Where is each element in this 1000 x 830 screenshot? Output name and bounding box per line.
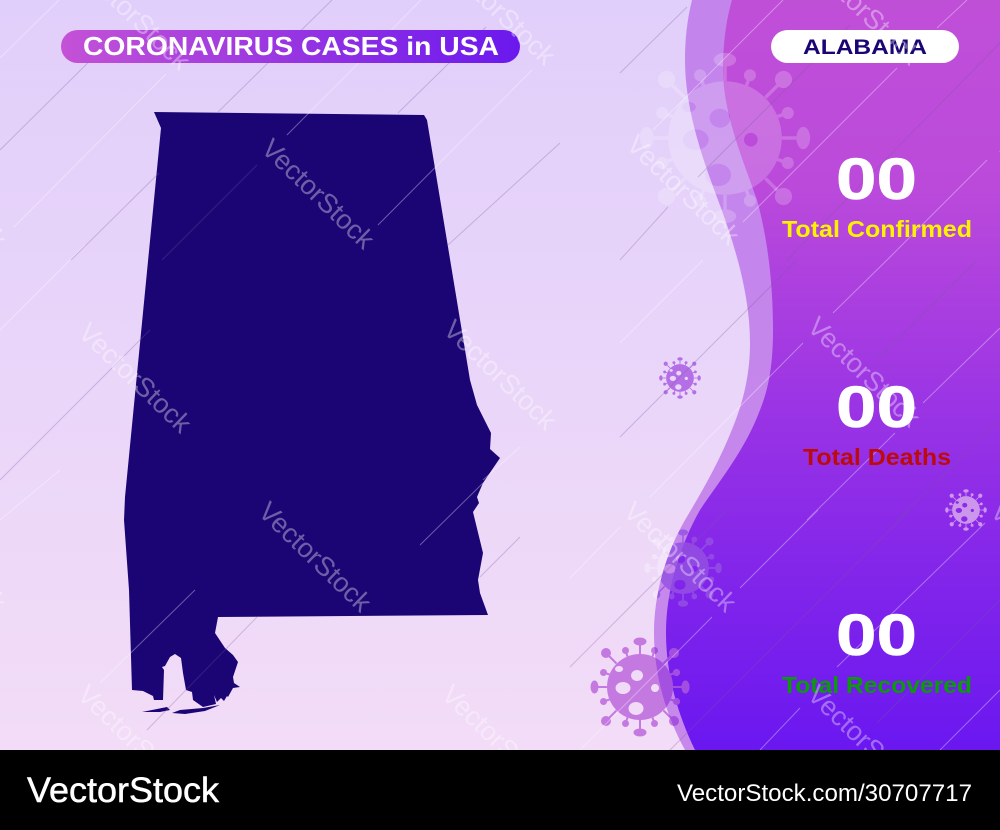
- icon: medium virus: [644, 529, 722, 607]
- watermarks bottom row clipped by footer: VectorStock: [72, 679, 197, 801]
- map: Alabama: [124, 112, 500, 714]
- outer translucent wave: [654, 0, 1000, 750]
- title pill: [61, 30, 520, 63]
- icon: small virus centre: [659, 357, 701, 399]
- watermarks: VectorStock: [802, 311, 927, 433]
- watermarks bottom row clipped by footer: VectorStock: [436, 679, 561, 801]
- watermarks bottom row clipped by footer: VectorStock: [802, 679, 927, 801]
- watermarks: [0, 0, 1000, 618]
- main gradient panel: [666, 0, 1000, 750]
- watermarks bottom row clipped by footer: [72, 679, 927, 801]
- state pill: [771, 30, 959, 63]
- watermarks: VectorStock: [618, 496, 743, 618]
- title text: CORONAVIRUS CASES in USA: [83, 31, 499, 61]
- watermarks: VectorStock: [256, 133, 381, 255]
- stat: total recovered: 00: [836, 603, 917, 668]
- stat: total recovered: [782, 603, 972, 698]
- footer url: VectorStock.com/30707717: [677, 780, 972, 807]
- state name: ALABAMA: [803, 35, 927, 59]
- watermarks: VectorStock: [621, 129, 746, 251]
- stat: total deaths: 00: [836, 375, 917, 440]
- stat: total deaths: [803, 375, 951, 470]
- footer bar: [0, 750, 1000, 830]
- footer brand: VectorStock: [27, 771, 220, 810]
- label: total recovered: Total Recovered: [782, 672, 972, 698]
- icon: large virus bottom: [590, 638, 690, 736]
- watermarks: VectorStock: [73, 317, 198, 439]
- stat: total confirmed: 00: [836, 147, 917, 212]
- watermarks: VectorStock: [253, 496, 378, 618]
- icon: small virus right: [945, 489, 987, 531]
- watermarks: VectorStock: [438, 314, 563, 436]
- icon: large virus top: [640, 53, 810, 223]
- stat: total confirmed: [782, 147, 972, 242]
- label: total deaths: Total Deaths: [803, 444, 951, 470]
- label: total confirmed: Total Confirmed: [782, 216, 972, 242]
